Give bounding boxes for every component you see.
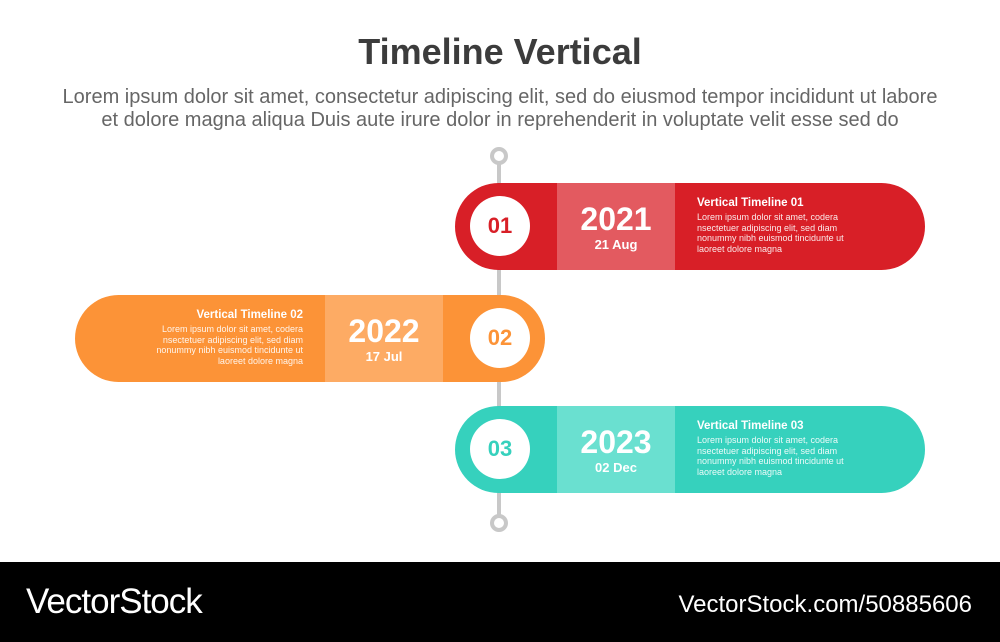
item 2 — [75, 295, 545, 382]
footer url: VectorStock.com/50885606 — [678, 591, 972, 618]
date 2021 — [557, 183, 675, 270]
date 2021: 21 Aug — [595, 237, 637, 252]
subtitle: Lorem ipsum dolor sit amet, consectetur adipiscing elit, sed do eiusmod tempor incididunt ut labore — [63, 86, 937, 108]
number circle 02: 02 — [488, 325, 512, 350]
date 2023: 02 Dec — [595, 460, 637, 475]
footer logo: VectorStock — [26, 582, 202, 621]
subtitle: et dolore magna aliqua Duis aute irure dolor in reprehenderit in voluptate velit esse sed do — [101, 109, 899, 131]
text 01: Vertical Timeline 01 — [697, 197, 804, 209]
text 01: Lorem ipsum dolor sit amet, codera nsectetuer adipiscing elit, sed diam nonummy nibh euismod tincidunte ut laoreet dolore magna — [697, 212, 844, 254]
number circle 03 — [470, 419, 530, 479]
text 03: Lorem ipsum dolor sit amet, codera nsectetuer adipiscing elit, sed diam nonummy nibh euismod tincidunte ut laoreet dolore magna — [697, 435, 844, 476]
item 3 — [455, 406, 925, 493]
date 2022: 17 Jul — [366, 349, 402, 364]
number circle 03: 03 — [488, 436, 512, 461]
subtitle — [63, 86, 937, 131]
date 2022: 2022 — [348, 313, 420, 349]
text 02: Vertical Timeline 02 — [196, 309, 303, 321]
date 2023 — [557, 406, 675, 493]
timeline axis — [490, 147, 508, 532]
number circle 01 — [470, 196, 530, 256]
date 2023: 2023 — [580, 424, 652, 460]
text 02: Lorem ipsum dolor sit amet, codera nsectetuer adipiscing elit, sed diam nonummy nibh euismod tincidunte ut laoreet dolore magna — [156, 324, 303, 366]
title: Timeline Vertical — [358, 31, 642, 72]
footer band — [0, 562, 1000, 642]
number circle 01: 01 — [488, 213, 512, 238]
item 1 — [455, 183, 925, 270]
date 2021: 2021 — [580, 201, 652, 237]
date 2022 — [325, 295, 443, 382]
number circle 02 — [470, 308, 530, 368]
text 03: Vertical Timeline 03 — [697, 420, 804, 432]
